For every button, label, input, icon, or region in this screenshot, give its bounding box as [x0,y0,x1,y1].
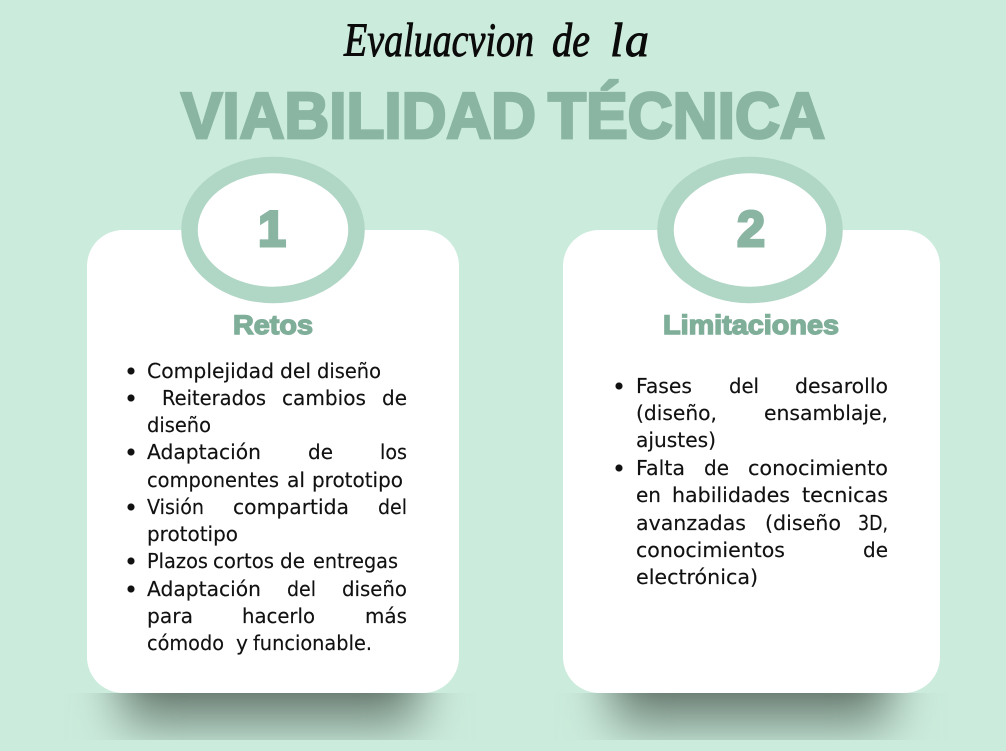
list: retos: prototipo [312,468,403,492]
list: retos: los [380,440,407,464]
list: retos: hacerlo [242,604,315,628]
list: retos: cortos [213,549,274,573]
list: limitaciones [616,374,888,589]
list: retos: de [308,440,333,464]
list: limitaciones: de [704,456,729,480]
list: retos: diseño [342,577,407,601]
list: limitaciones: electrónica) [636,565,758,589]
list: retos: del [280,359,311,383]
card shadow [122,693,418,740]
list: limitaciones: tecnicas [802,483,888,507]
heading: limitaciones: Limitaciones [663,310,839,340]
list: limitaciones: conocimiento [748,456,888,480]
panel: retos [87,165,459,740]
number badge 2: 2 [737,201,765,257]
list: limitaciones: (diseño [765,511,841,535]
panel: limitaciones [563,165,940,740]
title: main heading: TÉCNICA [548,80,825,152]
list: limitaciones: avanzadas [636,511,746,535]
list: limitaciones: conocimientos [636,538,785,562]
list: retos: compartida [233,495,349,519]
list: retos: funcionable. [253,631,372,655]
list: limitaciones: de [863,538,888,562]
list: retos: Visión [147,495,204,519]
list: retos: prototipo [147,522,238,546]
list: retos: componentes [147,468,279,492]
list: retos: de [280,549,305,573]
title: script line: de [552,14,590,67]
list: retos: para [147,604,193,628]
list: limitaciones: del [729,374,759,398]
number badge 1: 1 [258,201,286,257]
list: retos: de [382,386,407,410]
list: retos: Adaptación [147,577,261,601]
list: limitaciones: 3D, [858,511,888,535]
list: retos: entregas [313,549,398,573]
list: retos: cómodo [147,631,224,655]
list: retos: del [378,495,407,519]
list: retos: Complejidad [147,359,274,383]
list: retos: cambios [282,386,366,410]
list: retos: diseño [147,413,211,437]
list: retos: al [287,468,305,492]
list: retos: del [287,577,316,601]
list: retos [128,359,407,655]
list: retos: diseño [317,359,381,383]
list: limitaciones: Falta [636,456,685,480]
list: limitaciones: desarollo [795,374,888,398]
number badge 1 [190,165,356,295]
list: retos: Adaptación [147,440,261,464]
list: retos: Reiterados [162,386,266,410]
list: limitaciones: (diseño, [636,401,717,425]
list: retos: y [236,631,248,655]
title: main heading: VIABILIDAD [181,80,536,152]
list: retos: más [365,604,407,628]
card [563,230,940,693]
list: limitaciones: ajustes) [636,428,716,452]
list: retos: Plazos [147,549,208,573]
number badge 2 [666,165,834,295]
list: limitaciones: Fases [636,374,692,398]
card [87,230,459,693]
list: limitaciones: en [636,483,661,507]
list: limitaciones: ensamblaje, [764,401,888,425]
heading: retos: Retos [233,310,313,340]
card shadow [612,693,890,740]
list: limitaciones: habilidades [672,483,790,507]
title: script line: Evaluacvion [343,14,534,67]
title: script line: la [610,14,649,67]
